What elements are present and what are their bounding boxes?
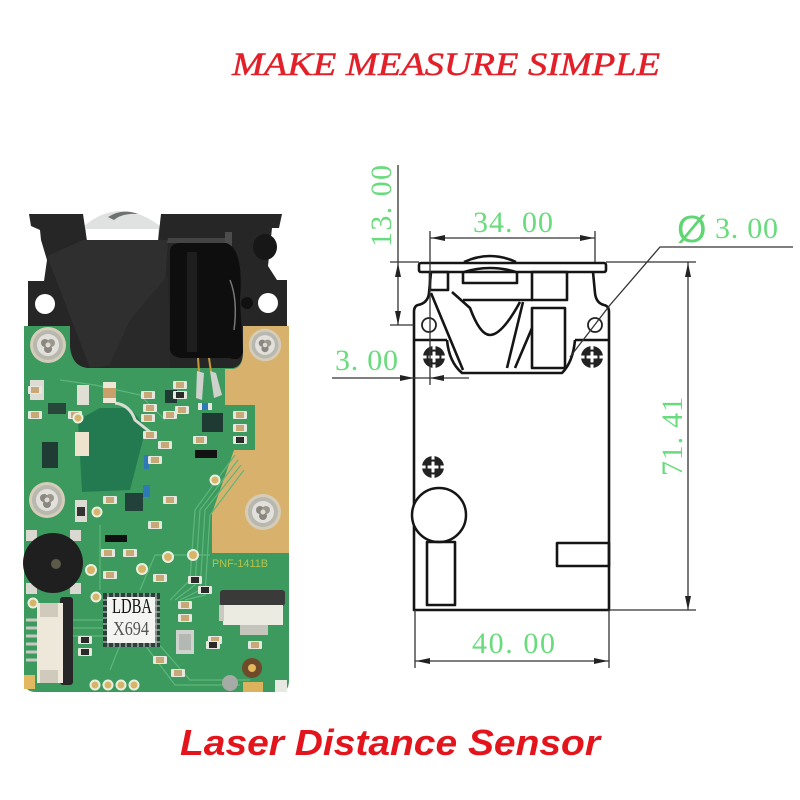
dimension: diameter 3.00: 3. 00 <box>715 212 778 245</box>
screws <box>29 327 281 530</box>
dimension: 71.41 <box>606 262 696 610</box>
dimension: 71.41: 71. 41 <box>656 397 689 476</box>
dimension: 3.00: 3. 00 <box>335 344 398 377</box>
dimension: 40.00 <box>415 610 609 668</box>
lens <box>84 211 160 242</box>
caption: Laser Distance Sensor <box>180 722 602 763</box>
surface components <box>28 380 262 677</box>
ribbon connector <box>219 590 285 635</box>
module outline <box>412 256 609 610</box>
black housing <box>28 214 287 370</box>
dimension: diameter 3.00: Ø <box>677 209 707 251</box>
dimension: 13.00 <box>365 165 419 325</box>
laser cylinder <box>170 243 243 359</box>
buzzer <box>23 530 83 594</box>
dimension drawing <box>332 165 793 668</box>
dimension: 34.00: 34. 00 <box>473 206 553 239</box>
left connector <box>24 597 73 689</box>
sensor photo <box>23 211 289 692</box>
dimension: 34.00 <box>430 206 595 385</box>
board marking: PNF-1411B <box>212 558 268 570</box>
dimension: diameter 3.00 <box>570 209 793 357</box>
gold leads <box>196 358 222 400</box>
main chip <box>103 593 160 647</box>
circuit board <box>24 326 289 692</box>
title: MAKE MEASURE SIMPLE <box>231 47 660 83</box>
dimension: 13.00: 13. 00 <box>365 165 398 247</box>
chip label: LDBA <box>112 594 153 618</box>
corner pads <box>222 658 287 692</box>
dimension: 3.00 <box>332 344 469 381</box>
solder vias <box>28 414 220 690</box>
chip code: X694 <box>113 618 149 640</box>
dimension: 40.00: 40. 00 <box>472 627 555 660</box>
